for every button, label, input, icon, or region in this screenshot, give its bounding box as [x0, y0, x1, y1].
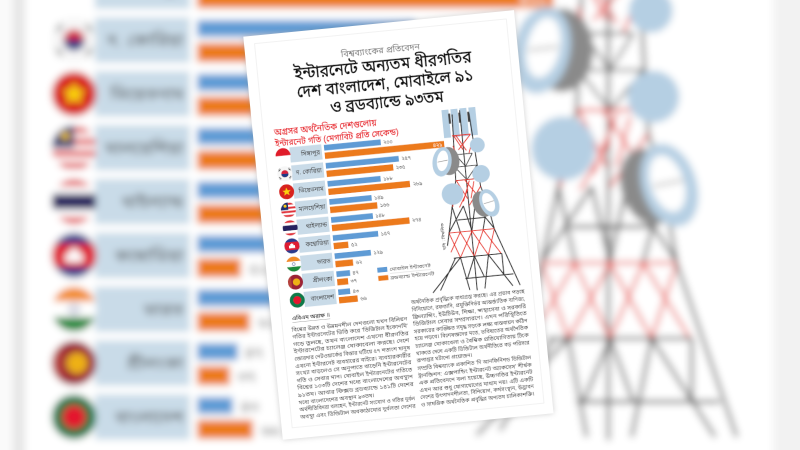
article: right column: রূপান্তর ঘটানো প্রয়োজন।: [415, 351, 473, 364]
article: right column: সরকারের কাঙ্ক্ষিত সমৃদ্ধ সড়কে লক্ষ্য বাস্তবায়ন কঠিন: [413, 316, 528, 335]
article: right column: হয়ে পড়বে। বিশেষজ্ঞদের মতে, ভবিষ্যতের অর্থনৈতিক: [413, 324, 529, 343]
article: left column: গতি ও সেবার মান। মোবাইল ইন্টারনেটের গতিতে: [296, 365, 413, 385]
legend: মোবাইল ইন্টারনেট: [389, 263, 431, 273]
article: right column: দেশের উৎপাদনশীলতা, বিনিয়োগ, কর্মসংস্থান, উদ্ভাবন: [420, 382, 535, 401]
row: Cambodia: [283, 228, 391, 255]
photo credit: ছবি : সিম্বলিক: [439, 222, 447, 251]
row: Singapore: ৪২১: [433, 142, 443, 149]
row: Malaysia: [280, 192, 390, 219]
row: Cambodia: ১৫৭: [380, 231, 390, 238]
article: right column: ও সামগ্রিক অর্থনৈতিক প্রবৃদ্ধির অন্যতম চালিকাশক্তি।: [421, 390, 535, 409]
newspaper clipping: [243, 10, 554, 440]
dish: middle left: [441, 182, 464, 206]
row: Thailand: থাইল্যান্ড: [306, 221, 328, 231]
article: left column: ৯১তম। আবার ফিক্সড ব্রডব্যান্ডে ১৪১টি দেশের: [298, 380, 414, 399]
row: Vietnam: ২৮৯: [413, 181, 423, 188]
article: right column: বিনিয়োগে, রফতানি, প্রযুক্তিনির্ভর আন্তর্জাতিক বাণিজ্য,: [410, 294, 526, 314]
row: South Korea: ২৩৫: [396, 164, 406, 171]
headline: ও ব্রডব্যান্ডে ৯৩তম: [329, 87, 445, 117]
row: South Korea: [276, 153, 412, 183]
byline: এবিএম অরাফ ॥: [292, 311, 330, 322]
row: Sri Lanka: শ্রীলংকা: [312, 275, 333, 285]
row: Vietnam: [278, 171, 423, 201]
row: Thailand: ২৭৪: [412, 217, 422, 224]
headline: [292, 46, 477, 120]
chart heading: [273, 115, 399, 149]
clipping drop shadow: [243, 10, 554, 440]
row: India: [285, 247, 384, 273]
article: right column: সম্প্রতি বিশ্বব্যাংক প্রকাশিত 'দি আনফিনিশড ডিজিটাল: [416, 353, 532, 372]
headline: দেশ বাংলাদেশ, মোবাইলে ৯১: [296, 65, 474, 102]
row: Vietnam: ভিয়েতনাম: [297, 184, 324, 195]
article: left column: এখনো ইন্টারনেট ব্যবহারের বাইরে। ব্যবহারকারীর: [295, 351, 412, 370]
row: Bangladesh: বাংলাদেশ: [310, 294, 335, 303]
dish: upper right: [469, 137, 485, 153]
legend: [377, 262, 435, 282]
row: Singapore: সিঙ্গাপুর: [300, 148, 321, 158]
row: Cambodia: ৫২: [351, 242, 359, 249]
row: South Korea: ২৫৭: [401, 156, 411, 163]
article: right column: [410, 287, 536, 409]
article: left column: সংখ্যা বাড়লেও সে অনুপাতে বাড়েনি ইন্টারনেটের: [294, 358, 412, 377]
article: left column: ইন্টারনেটের চ্যালেঞ্জ মোকাবেলা করছে। দেশে: [292, 336, 411, 356]
article: left column: গড়ে তুলছে, তখন বাংলাদেশ এখনো ধীরগতির: [293, 329, 409, 348]
row: South Korea: দ. কোরিয়া: [295, 166, 323, 177]
row: Sri Lanka: ৪৭: [352, 270, 359, 277]
article: left column: [290, 314, 417, 421]
article: right column: চ্যালেঞ্জ মোকাবেলা ও বৈশ্বিক প্রতিযোগিতায় টিকে: [414, 331, 529, 350]
row: Thailand: [281, 207, 422, 237]
row: Thailand: ১৪৮: [375, 213, 385, 220]
dish: middle right: [471, 164, 491, 183]
legend: ব্রডব্যান্ড ইন্টারনেট: [389, 271, 435, 281]
article: right column: ফ্রিল্যান্সিং, ইউটিউব, শিক্ষা, স্বাস্থ্যসেবা ও সরকারি: [411, 302, 527, 321]
article: right column: অর্থনৈতিক প্রবৃদ্ধিকে বাধাগ্রস্ত করছে। এর প্রভাব পড়ছে: [410, 287, 525, 306]
row: India: ১২৯: [373, 250, 383, 256]
row: India: ৬২: [356, 260, 363, 266]
chart heading: ইন্টারনেট গতি (মেগাবিট প্রতি সেকেন্ড): [274, 126, 399, 149]
row: Vietnam: ১৮৮: [383, 176, 393, 182]
row: Sri Lanka: [287, 268, 360, 291]
article: right column: ডিজিটাল সেবার সম্প্রসারণে। এমন পরিস্থিতিতে: [412, 309, 528, 328]
article: left column: বিশ্বের ১০৩টি দেশের মধ্যে বাংলাদেশের অবস্থান: [296, 372, 414, 392]
row: Bangladesh: [289, 285, 367, 309]
article: right column: এক প্রতিবেদনে বলা হয়েছে, উচ্চগতির ইন্টারনেট: [419, 368, 534, 387]
row: Malaysia: ১৬৬: [380, 202, 390, 209]
article: left column: অর্থনীতিবিদরা বলছেন, ইন্টারনেট সংযোগ ও গতির দুর্বল: [298, 394, 416, 414]
row: Singapore: ২০০: [383, 139, 393, 146]
dish: lower right: [468, 185, 504, 221]
article: left column: মধ্যে বাংলাদেশের অবস্থান ৯৩তম।: [297, 392, 375, 406]
row: Singapore: [274, 132, 445, 165]
chart heading: অগ্রসর অর্থনৈতিক দেশগুলোয়: [273, 117, 378, 139]
dish: upper left: [428, 144, 461, 179]
row: India: ভারত: [316, 259, 332, 266]
article: left column: অবস্থা এবং ডিজিটাল অবকাঠামোর দুর্বলতা দেশের: [299, 401, 416, 421]
article: right column: ট্রানজিশন: এক্সপান্ডিং ইন্টারনেট অ্যাকসেস' শীর্ষক: [417, 360, 532, 380]
kicker: বিশ্বব্যাংকের প্রতিবেদন: [339, 41, 421, 59]
antenna panels: [441, 107, 478, 138]
bar chart: [274, 132, 459, 309]
row: Sri Lanka: ৩৭: [350, 278, 357, 285]
article: left column: গতির ইন্টারনেটের ভিত্তি করে 'ডিজিটাল ইকোনমি': [292, 322, 408, 341]
row: Malaysia: মালয়েশিয়া: [297, 202, 326, 213]
icon: telecom tower: [415, 104, 520, 295]
article: left column: জোরদার নেটওয়ার্কের বিস্তার ঘটিয়ে ৫৭ শতাংশ মানুষ: [294, 343, 411, 363]
article: right column: এখন আর শুধু যোগাযোগের মাধ্যম নয়। এটি একটি: [419, 375, 534, 394]
row: Cambodia: কম্বোডিয়া: [304, 239, 330, 249]
article: right column: থাকতে দেশে একটি ডিজিটাল অর্থনীতিতে বড় পরিসরে: [416, 338, 530, 357]
article: left column: বিশ্বের উন্নত ও উন্নয়নশীল দেশগুলো যখন বিলিয়ন: [290, 314, 408, 334]
row: Malaysia: ১৪৯: [374, 195, 384, 202]
headline: ইন্টারনেটে অন্যতম ধীরগতির: [292, 46, 473, 83]
row: Bangladesh: ৪৩: [352, 288, 359, 295]
row: Bangladesh: ৬৬: [360, 296, 367, 302]
